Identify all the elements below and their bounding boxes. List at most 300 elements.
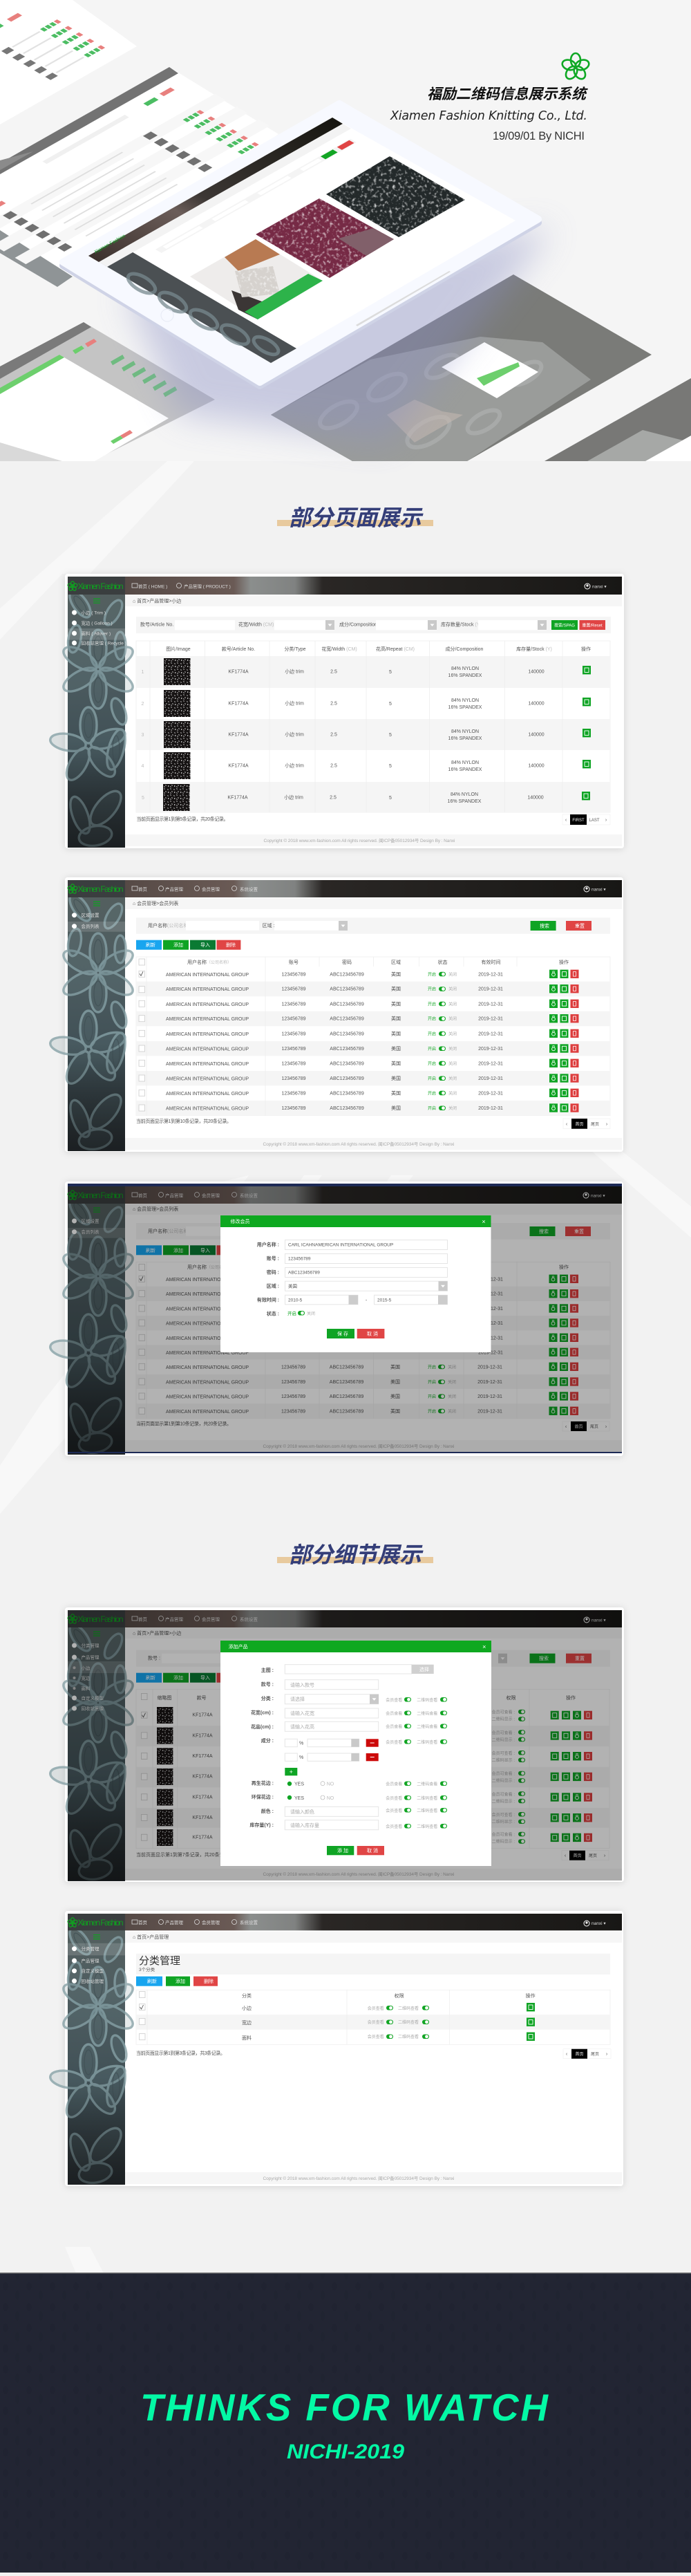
form fields: 再生花边 : [252,1780,274,1786]
sidebar menu: 会员列表 [82,1229,100,1235]
table row 8: 关闭 [448,1076,457,1081]
table row 1: 2019-12-31 [478,972,503,977]
table row 8: ABC123456789 [330,1380,363,1385]
form fields: 选择 [419,1666,429,1672]
heading: page showcase: 部分页面展示 [289,505,424,530]
pagination: 尾页 [591,2052,599,2057]
search bar: 用户名称(公司名称) : [148,922,193,928]
dialog: add product: × [482,1643,486,1650]
table row 1: 美国 [391,971,401,977]
form fields: + [290,1768,293,1775]
action buttons: 删除 [226,942,236,948]
pagination: › [606,2052,608,2057]
table row 3: KF1774A [192,1754,213,1759]
table row 1: 1 [142,670,144,675]
table row 6: AMERICAN INTERNATIONAL GROUP [166,1047,249,1052]
search bar [136,1650,610,1667]
table row: allover: 面料 [242,2035,252,2041]
table row 5: 开启 [428,1031,436,1036]
user menu: nanxi ▾ [592,585,607,589]
action buttons: 导入 [200,1248,210,1253]
table row 2 [139,1289,578,1298]
table row 9: 关闭 [448,1394,456,1399]
table row 4: 小边 trim [285,762,304,769]
table row 4: 84% NYLON [451,760,479,765]
sidebar menu: 小边 [82,1665,91,1671]
table row 4: 2.5 [330,763,337,769]
pagination: 尾页 [590,1424,598,1430]
table row 3: 会员可查看 : [492,1751,515,1756]
table row 1: 二维码显示 : [492,1717,515,1722]
table row 10: 关闭 [448,1105,457,1111]
sidebar menu: 面料 [82,1686,91,1691]
add button: 添 加 [337,1847,348,1854]
breadcrumb: ⌂ 首页>产品管理 [133,1934,169,1940]
form fields: 花高(cm) : [251,1724,274,1730]
section title box: 分类管理 [139,1955,180,1967]
table header [166,646,591,652]
top navigation [132,1192,258,1199]
table row 8 [139,1377,578,1386]
visibility toggles: 会员查看 [386,1724,402,1730]
table row 4 [142,752,591,779]
pagination [562,814,610,825]
table row 1: 140000 [528,669,545,675]
table row 9 [139,1089,579,1097]
sidebar menu [68,902,125,932]
table row 3: KF1774A [228,733,249,737]
sidebar menu: 区域设置 [82,912,100,918]
table header [139,959,569,965]
table row 5 [139,1334,578,1342]
table row 7: ABC123456789 [330,1061,364,1066]
table row 9: 美国 [391,1090,401,1096]
table row 6: 关闭 [448,1046,457,1052]
pagination: FIRST [572,819,585,823]
action buttons: 导入 [200,1675,210,1681]
table row: galloon [140,2017,535,2026]
thanks headline: THINKS FOR WATCH [140,2386,550,2429]
footer: Copyright © 2018 www.xm-fashion.com All rights reserved. 闽ICP备05012934号 Design By : Nanxi [263,1871,455,1877]
visibility toggles: 二维码查看 [417,1808,437,1813]
table row 4: KF1774A [192,1775,213,1780]
table row 8: 关闭 [448,1379,456,1385]
table row 4: AMERICAN INTERNATIONAL GROUP [166,1322,249,1326]
table row 1: ABC123456789 [330,972,364,977]
dim overlay [68,1610,622,1880]
breadcrumb: ⌂ 会员管理>会员列表 [133,1206,178,1212]
table row 5: 2019-12-31 [478,1032,503,1036]
top navigation: 会员管理 [202,886,220,892]
dialog cancel button [357,1329,384,1338]
table row 5: 84% NYLON [451,792,478,797]
table row 3 [139,1304,578,1313]
table row 10 [139,1103,579,1112]
dialog form fields: 密码 : [267,1269,279,1275]
table row 5: KF1774A [192,1795,213,1800]
table row 7: 美国 [390,1363,400,1370]
user menu [584,1921,606,1926]
sidebar menu: 产品管理 [82,1958,100,1963]
table row 7 [139,1363,578,1371]
table row 9: 开启 [428,1394,436,1399]
search bar [136,617,611,633]
user menu [584,886,606,892]
table row 6: 二维码显示 : [492,1819,515,1824]
table row 8: ABC123456789 [330,1076,364,1081]
action buttons: 刷新 [147,1978,157,1984]
panel: trim product list [49,574,624,848]
table row 10: ABC123456789 [330,1106,364,1111]
table row 2: 123456789 [281,987,306,992]
table row 2: 会员可查看 : [492,1730,515,1735]
table row 5: 140000 [527,795,544,801]
action buttons: 删除 [204,1978,214,1984]
action buttons [136,1977,218,1986]
table row 3 [142,721,591,748]
date and author: 19/09/01 By NICHI [493,130,585,142]
sidebar menu: 分类管理 [82,1945,100,1952]
lace image: burgundy [256,198,394,278]
table row 7: 关闭 [448,1364,456,1370]
sidebar menu: 回收站管理 [82,1705,104,1712]
table row 4: 会员可查看 : [492,1771,515,1777]
dialog form fields: 用户名称 : [257,1242,279,1247]
table row 3 [139,1000,579,1008]
search bar: 重置 [575,924,585,929]
pagination: 首页 [573,1853,582,1858]
top navigation: 会员管理 [202,1616,220,1622]
cancel button [357,1846,384,1855]
tablet logo label: Xiamen Fashion [94,234,126,255]
table row: galloon: 会员查看 [368,2019,384,2025]
form fields: 成分 : [261,1737,274,1744]
table row 3: 2.5 [330,733,337,737]
table row 5: ABC123456789 [330,1032,364,1036]
table row: galloon: 宽边 [242,2019,252,2026]
dialog save button [327,1329,354,1338]
table row 4: 2019-12-31 [478,1321,503,1326]
company logo [561,53,590,81]
tablet device [63,104,538,386]
table row 10: 关闭 [448,1408,456,1414]
sidebar menu: 分类管理 [82,1643,100,1648]
top navigation: 产品管理 ( PRODUCT ) [184,584,231,589]
top navigation: 会员管理 [202,1919,220,1925]
user menu: nanxi ▾ [591,1193,605,1199]
search bar [136,1223,610,1240]
table row 3: ABC123456789 [330,1002,364,1007]
table row 1: 小边 trim [285,668,304,675]
sidebar menu: 小边 ( Trim ) [82,610,106,615]
dialog: add product [220,1641,491,1866]
top navigation: 会员管理 [202,1192,220,1199]
table row 10: 123456789 [281,1409,305,1414]
table row 6 [141,1809,592,1826]
top navigation: 系统设置 [240,886,258,892]
table row 7: 二维码显示 : [492,1839,515,1845]
table row 10: 2019-12-31 [477,1409,502,1414]
table row 9: 123456789 [281,1091,306,1096]
table row 3: 123456789 [281,1002,306,1007]
table row 3 [141,1748,592,1764]
action buttons: 添加 [173,942,183,948]
visibility toggles: 会员查看 [386,1795,402,1801]
table header: 缩略图 [158,1695,171,1701]
cancel button: 取 消 [367,1847,378,1854]
dialog form fields: - [366,1298,368,1303]
table row 6 [139,1044,579,1053]
tablet home button [161,309,173,321]
table row 10: 2019-12-31 [478,1106,503,1111]
action buttons: 添加 [176,1978,185,1984]
action buttons: 添加 [173,1674,183,1681]
action buttons [136,1673,240,1683]
table header: 账号 [289,959,299,965]
table row 3: 3 [142,733,144,738]
top navigation: 系统设置 [240,1919,258,1925]
table row: trim: 会员查看 [368,2006,384,2011]
dialog form fields: ABC123456789 [288,1271,320,1275]
table row 9: AMERICAN INTERNATIONAL GROUP [166,1395,249,1399]
user menu: nanxi ▾ [591,1921,606,1926]
table row 1: KF1774A [228,669,249,675]
form fields: 请输入颜色 [290,1809,314,1815]
top navigation [132,886,258,892]
table row 3: AMERICAN INTERNATIONAL GROUP [166,1307,249,1312]
table row 7: AMERICAN INTERNATIONAL GROUP [166,1365,249,1370]
table row 7: 123456789 [281,1061,306,1066]
pagination: ‹ [566,2052,568,2057]
table header [141,1694,576,1701]
table row 3: 16% SPANDEX [448,736,482,741]
visibility toggles: 会员查看 [386,1710,402,1716]
table row 5: 5 [389,796,392,801]
form fields: 花宽(cm) : [251,1709,274,1716]
pagination: 首页 [574,1424,583,1430]
table row 8: 123456789 [281,1380,305,1385]
table row 8 [139,1074,579,1083]
table row 2 [141,1728,592,1744]
table row 2: 140000 [528,701,545,707]
user menu [585,584,607,589]
panel: edit member dialog [49,1182,623,1456]
search bar: 成分/Composition : [339,621,380,628]
dialog form fields: CARL ICAHNAMERICAN INTERNATIONAL GROUP [288,1243,393,1247]
table row: allover: 二维码查看 [398,2034,419,2040]
pagination: ‹ [565,818,567,823]
lace image: white with brown [190,239,323,319]
hero: far-right screen [545,378,691,461]
top navigation: 产品管理 [165,1192,184,1199]
table row 4: 16% SPANDEX [448,767,482,772]
table row: allover [140,2033,535,2041]
table row 7: 开启 [428,1061,436,1066]
table header [140,1991,536,1999]
dialog form fields: 2015-5 [377,1298,392,1303]
table row 7: 2019-12-31 [477,1365,502,1370]
signature: NICHI-2019 [287,2440,404,2463]
visibility toggles: 二维码查看 [417,1739,437,1745]
table row: allover: 会员查看 [368,2034,384,2040]
visibility toggles: 二维码查看 [417,1824,437,1829]
visibility toggles: 会员查看 [386,1781,402,1786]
tablet shadow [124,228,553,442]
pagination: ‹ [565,1854,567,1858]
table row 5 [139,1029,579,1038]
sidebar menu: 会员列表 [82,923,100,929]
table row 5 [142,784,590,811]
table row 3: 2019-12-31 [478,1307,503,1312]
sidebar menu: 区域设置 [82,1218,100,1224]
pagination [562,1851,609,1860]
table row 3: 2019-12-31 [478,1002,503,1007]
sidebar menu: 回收站管理 [82,1978,104,1984]
table header: 操作 [581,646,591,652]
table row 6: 2019-12-31 [478,1350,503,1355]
table row 6: 美国 [391,1045,401,1052]
dialog cancel button: 取 消 [367,1330,378,1337]
sidebar menu [68,1207,125,1238]
data table [136,641,610,812]
table header: 图片/Image [166,646,191,652]
sidebar menu [68,599,126,646]
pagination: ‹ [565,1424,567,1430]
hero: upper-left table screen [0,0,137,124]
visibility toggles: 会员查看 [386,1739,402,1745]
user menu: nanxi ▾ [591,888,606,892]
top navigation: 系统设置 [240,1616,258,1622]
pagination: 尾页 [591,1122,599,1127]
table row 10: AMERICAN INTERNATIONAL GROUP [166,1106,249,1112]
panel: category management [49,1911,623,2186]
sidebar menu [68,1934,125,1984]
table row 2 [139,984,579,993]
table row 2: 开启 [428,987,436,992]
search bar: 区域 : [263,922,275,928]
form fields: 请输入花高 [290,1724,314,1730]
table row 2: AMERICAN INTERNATIONAL GROUP [166,987,249,992]
table row 8: 2019-12-31 [478,1076,503,1081]
table row 4 [141,1768,592,1785]
top bar logo: Xiamen Fashion [77,1191,123,1200]
table header: 操作 [559,959,569,965]
dialog form fields: 开启 [287,1310,296,1316]
table header: 款号 [197,1695,207,1701]
top bar logo: Xiamen Fashion [77,884,123,894]
top navigation [132,1616,258,1622]
table row 6: ABC123456789 [330,1047,364,1052]
table row 6: 2019-12-31 [478,1047,503,1052]
table row 2: 2019-12-31 [478,1292,503,1297]
table row 4: 140000 [528,763,545,769]
table row 4: 4 [142,764,144,769]
table row 9: 2019-12-31 [478,1091,503,1096]
dialog: edit member: 修改会员 [231,1218,250,1224]
table row 7: KF1774A [192,1836,213,1840]
table row 2: KF1774A [192,1733,213,1738]
top bar logo: Xiamen Fashion [77,1614,123,1624]
table row 4: 开启 [428,1016,436,1022]
pagination [562,1421,609,1431]
table row 6: AMERICAN INTERNATIONAL GROUP [166,1351,249,1356]
pagination: 首页 [575,2051,584,2057]
pagination: 尾页 [589,1854,597,1858]
table row 5: 会员可查看 : [492,1791,515,1797]
visibility toggles: 会员查看 [386,1808,402,1813]
form fields: 请输入花宽 [290,1710,314,1716]
hero title: 福励二维码信息展示系统 [427,86,588,102]
table row 10 [139,1407,578,1415]
table row 10: ABC123456789 [330,1409,363,1414]
table row 6: 开启 [428,1046,436,1052]
add button [327,1846,354,1855]
table row 1: 关闭 [448,971,457,977]
dialog form fields: 账号 : [267,1256,279,1261]
action buttons: 刷新 [146,1674,155,1681]
pagination: › [606,1122,608,1127]
table row 8: 2019-12-31 [477,1380,502,1385]
hero: login screen [271,274,652,461]
search bar: 重置 [574,1229,584,1235]
table row 9: 123456789 [281,1394,305,1399]
table header: 款号/Article No. [222,646,255,652]
table row 9 [139,1392,578,1401]
company name: Xiamen Fashion Knitting Co., Ltd. [390,109,587,123]
search bar: 搜索 [540,922,549,929]
pagination: › [604,1854,606,1858]
search bar: 重置 [575,1656,585,1661]
sidebar menu: 宽边 ( Galloon ) [82,619,113,626]
table row 1: 2019-12-31 [478,1277,503,1282]
table row 7 [141,1829,592,1846]
table header: 区域 [391,959,401,965]
table row 1: 123456789 [281,972,306,977]
footer: Copyright © 2018 www.xm-fashion.com All rights reserved. 闽ICP备05012934号 Design By : Nanxi [263,1443,455,1449]
panel: add product dialog [49,1607,624,1882]
table row 2: 小边 trim [285,700,304,707]
breadcrumb: ⌂ 首页>产品管理>小边 [133,597,181,604]
sidebar menu: 自定义模型 [82,1695,104,1701]
table row 1 [142,658,591,685]
table row 5: AMERICAN INTERNATIONAL GROUP [166,1032,249,1037]
table row 5: 5 [142,796,144,801]
table row 6: 123456789 [281,1047,306,1052]
top navigation: 首页 [138,1919,148,1925]
table row 1: 16% SPANDEX [448,673,482,678]
table row 2: AMERICAN INTERNATIONAL GROUP [166,1292,249,1297]
table row 2: 84% NYLON [451,698,479,703]
search bar: 花宽/Width (CM) : [238,621,276,628]
user menu [584,1617,606,1623]
top navigation: 首页 ( HOME ) [138,584,167,589]
table row 2: 关闭 [448,987,457,992]
table header: 权限 [395,1992,404,1999]
table row 5: 123456789 [281,1032,306,1036]
form fields: 请输入款号 [290,1681,314,1688]
action buttons [136,940,240,950]
top navigation: 首页 [138,1192,148,1199]
table row: trim [140,2003,535,2011]
table row 10: 123456789 [281,1106,306,1111]
background diagonal streaks [0,461,691,2273]
visibility toggles: 二维码查看 [417,1724,437,1730]
table row 4: ABC123456789 [330,1017,364,1022]
table row 5: 16% SPANDEX [448,799,482,804]
panel: member list [49,877,623,1152]
table header: 成分/Composition [446,646,484,652]
table row 3: 二维码显示 : [492,1757,515,1763]
